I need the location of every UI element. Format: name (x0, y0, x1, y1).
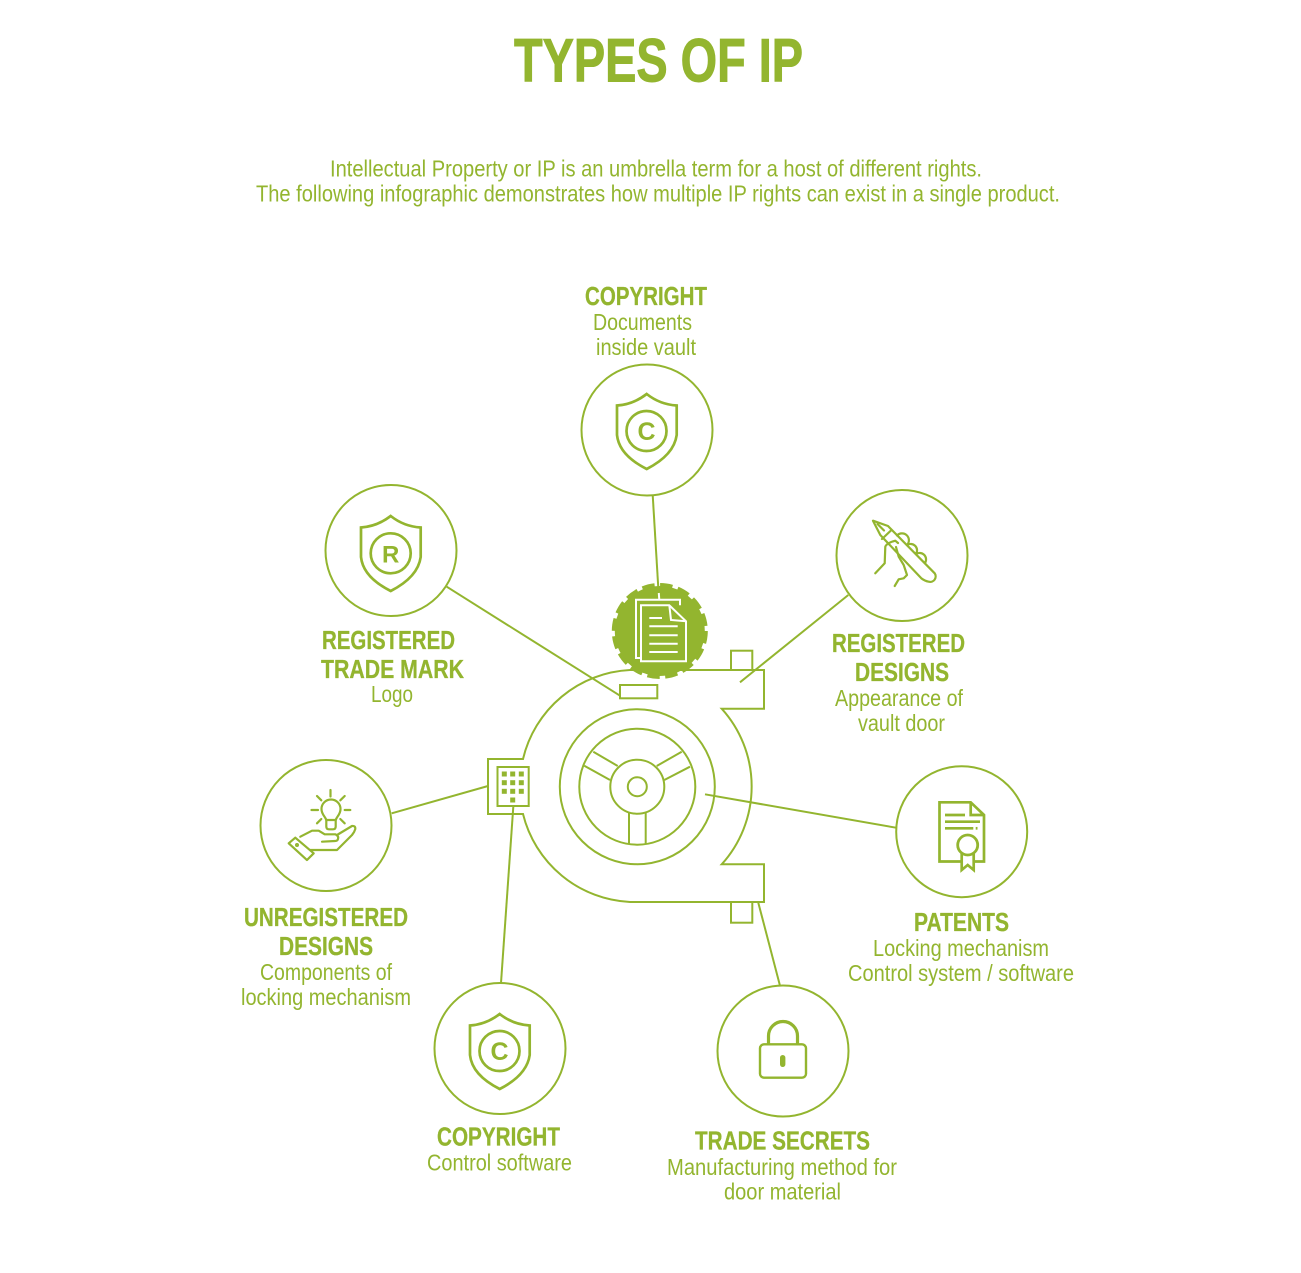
label: registered designs (832, 630, 965, 736)
label: unregistered designs: locking mechanism (241, 984, 411, 1010)
circle: trade secrets (718, 986, 848, 1116)
node: registered designs (832, 490, 968, 736)
title: TYPES OF IP (514, 27, 803, 95)
label: copyright documents (585, 283, 707, 360)
label: copyright documents: inside vault (596, 334, 697, 360)
intro text: The following infographic demonstrates how multiple IP rights can exist in a single product. (256, 181, 1060, 207)
label: registered trade mark: TRADE MARK (321, 656, 464, 684)
circle: copyright documents (582, 364, 712, 496)
label: registered trade mark: REGISTERED (322, 627, 455, 655)
label: registered designs: DESIGNS (855, 659, 949, 687)
node: trade secrets (667, 986, 897, 1204)
label: copyright documents: Documents (593, 309, 692, 335)
icon: padlock (760, 1021, 806, 1078)
vault body (488, 670, 764, 902)
label: copyright control software (427, 1124, 572, 1176)
label: trade secrets: TRADE SECRETS (695, 1128, 870, 1156)
label: registered designs: Appearance of (835, 685, 964, 711)
label: patents (848, 909, 1074, 986)
connector lines (392, 495, 896, 986)
label: unregistered designs: UNREGISTERED (244, 904, 408, 932)
label: patents: Locking mechanism (873, 935, 1049, 961)
label: trade secrets (667, 1128, 897, 1204)
label: copyright control software: COPYRIGHT (437, 1124, 560, 1152)
icon: registered shield (361, 516, 421, 591)
intro text (256, 156, 1060, 207)
label: registered trade mark (321, 627, 464, 707)
icon: copyright shield (470, 1014, 530, 1089)
keypad (498, 767, 529, 806)
label: registered designs: vault door (858, 710, 945, 736)
documents gear (614, 585, 706, 677)
vault hinges (731, 651, 752, 923)
icon: hand with light bulb (289, 790, 355, 860)
circle: copyright control software (434, 983, 566, 1114)
circle: unregistered designs (260, 760, 392, 891)
icon: copyright shield: C (490, 1038, 509, 1066)
logo plate (620, 685, 657, 698)
circle: patents (896, 766, 1027, 897)
circle: registered trade mark (326, 485, 456, 616)
node: copyright documents (582, 283, 712, 496)
icon: registered shield: R (382, 542, 399, 568)
node: patents (848, 766, 1074, 986)
circle: registered designs (836, 490, 968, 621)
label: unregistered designs: DESIGNS (279, 933, 373, 961)
label: trade secrets: door material (724, 1178, 841, 1204)
icon: copyright shield (617, 394, 677, 469)
node: unregistered designs (241, 760, 411, 1010)
label: copyright documents: COPYRIGHT (585, 283, 707, 311)
vault illustration (488, 585, 764, 923)
label: registered designs: REGISTERED (832, 630, 965, 658)
label: trade secrets: Manufacturing method for (667, 1154, 897, 1180)
node: registered trade mark (321, 485, 464, 707)
label: copyright control software: Control software (427, 1150, 572, 1176)
icon: patent certificate (940, 802, 984, 870)
label: unregistered designs: Components of (260, 959, 393, 985)
label: registered trade mark: Logo (371, 681, 413, 707)
icon: copyright shield: C (637, 418, 656, 446)
label: unregistered designs (241, 904, 411, 1010)
node: copyright control software (427, 983, 572, 1176)
label: patents: PATENTS (914, 909, 1009, 937)
vault door wheel (560, 709, 715, 864)
icon: hand holding pencil (873, 521, 936, 586)
intro text: Intellectual Property or IP is an umbrella term for a host of different rights. (330, 156, 982, 182)
label: patents: Control system / software (848, 960, 1074, 986)
